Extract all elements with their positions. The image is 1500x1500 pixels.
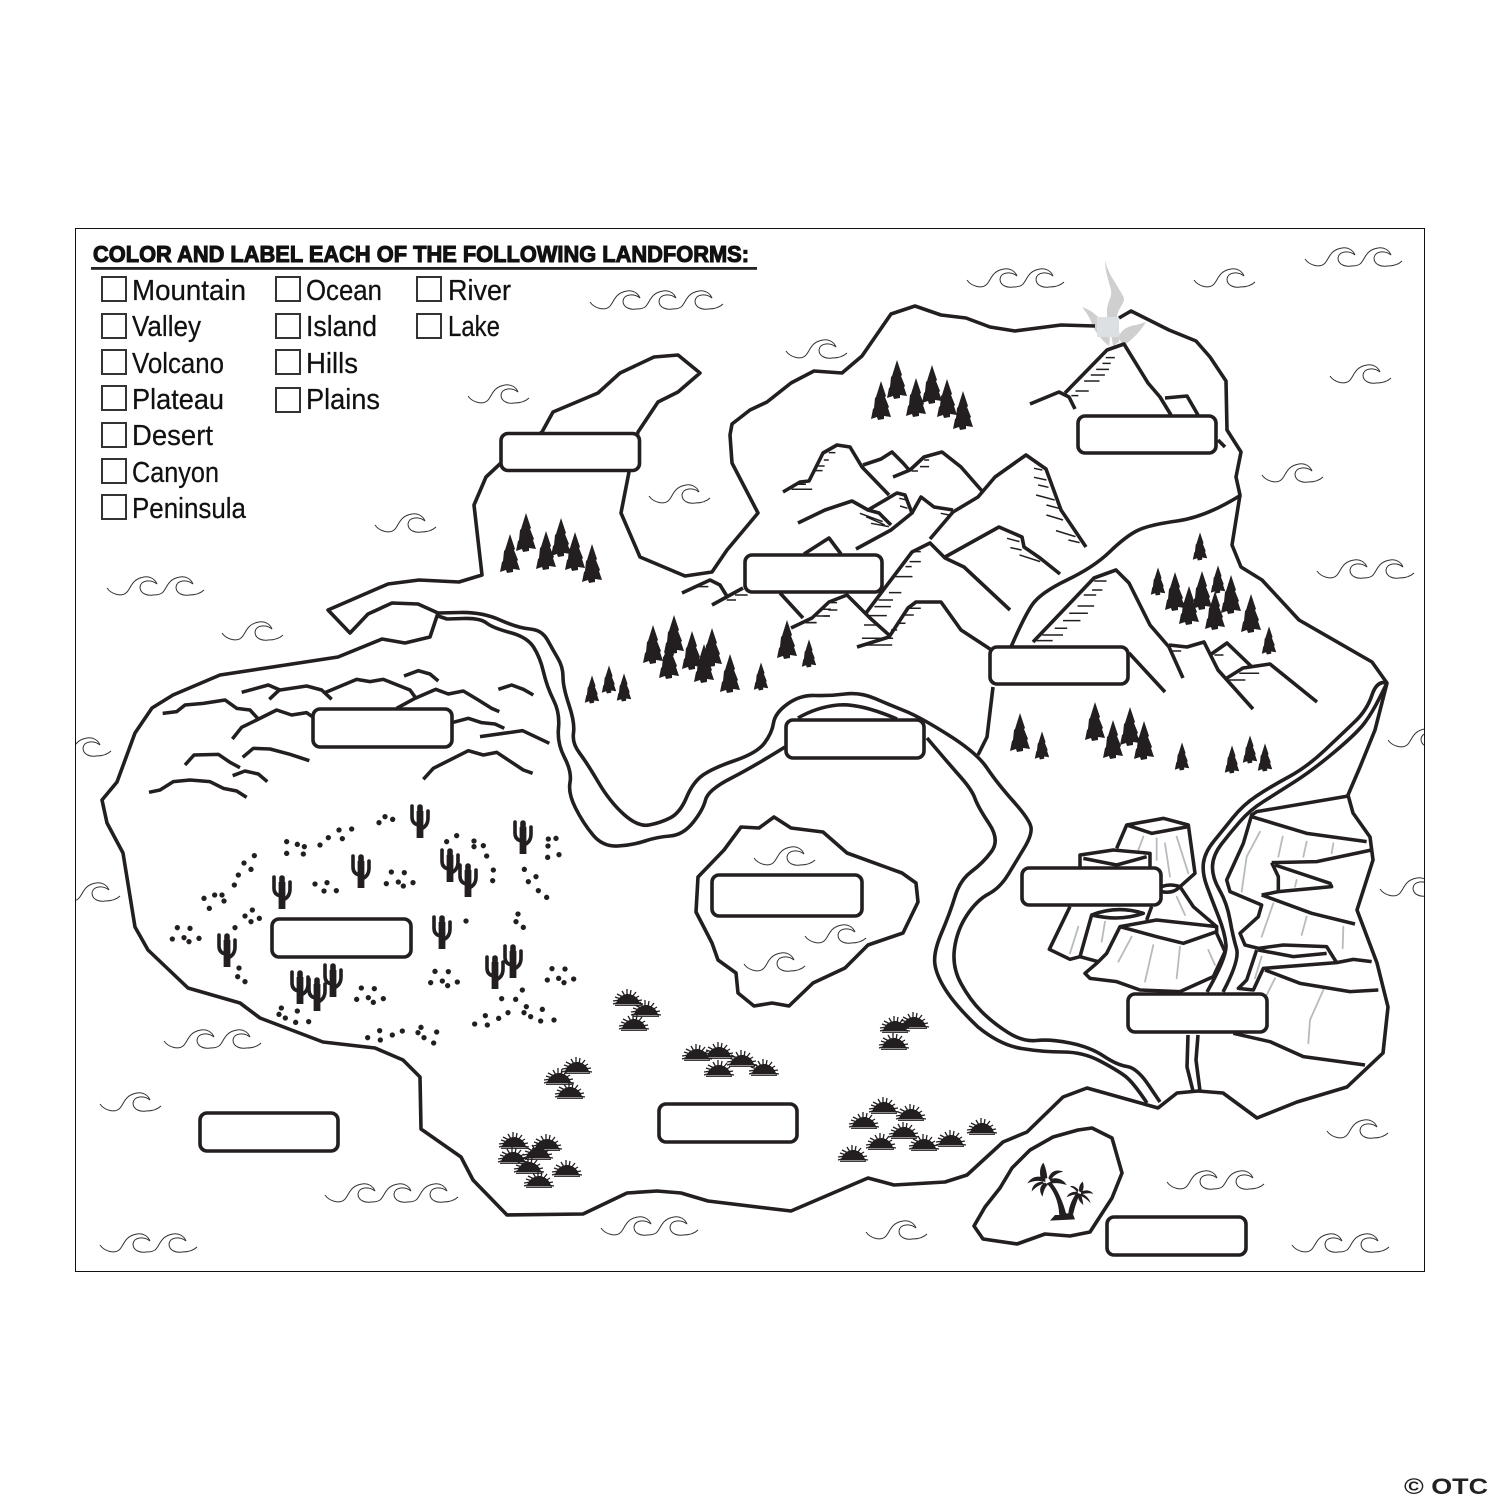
checklist item: Mountain: Mountain: [132, 275, 246, 307]
checklist item: Volcano: [102, 348, 224, 380]
label box: island: [1107, 1217, 1246, 1255]
checklist item: Hills: [276, 348, 358, 380]
checklist item: Ocean: [276, 275, 382, 307]
label box: plateau: [1022, 868, 1161, 905]
land coastline: [102, 306, 1388, 1215]
checklist item: River: [417, 275, 511, 307]
canyon and plateau water marks: [1070, 832, 1343, 1043]
checklist item: Canyon: [102, 457, 219, 489]
ocean waves: [50, 248, 1449, 1252]
copyright mark: © OTC: [1404, 1474, 1488, 1499]
label box: desert: [272, 919, 411, 957]
checklist item: Ocean: Ocean: [306, 275, 382, 307]
label box: canyon: [1128, 994, 1267, 1032]
northwest hills: [149, 671, 549, 797]
checklist item: Desert: Desert: [132, 420, 213, 452]
label box: mountain: [990, 647, 1128, 684]
checklist item: Valley: [102, 311, 201, 343]
lake outline: [696, 817, 918, 1006]
checklist item: Canyon: Canyon: [132, 457, 219, 489]
desert cacti: [219, 806, 531, 1011]
checklist item: Peninsula: Peninsula: [132, 493, 247, 525]
checklist item: Lake: [417, 311, 500, 343]
plains grass tufts: [498, 989, 997, 1187]
checklist item: Island: Island: [306, 311, 377, 343]
icon: palm trees: [1027, 1163, 1093, 1221]
label boxes: [200, 416, 1267, 1255]
mountains: [682, 344, 1317, 755]
label box: lake: [712, 875, 862, 916]
canyon walls: [1227, 796, 1378, 1065]
checklist item: Plains: Plains: [306, 384, 380, 416]
palm island outline: [974, 1128, 1122, 1244]
volcano cone: [1030, 392, 1075, 409]
label box: plains: [659, 1104, 797, 1142]
label box: peninsula: [501, 434, 640, 470]
desert sand dots: [172, 817, 574, 1043]
label box: ocean: [200, 1113, 338, 1151]
checklist item: Lake: Lake: [448, 311, 500, 343]
forests: [500, 360, 1276, 773]
label box: volcano: [1078, 416, 1216, 453]
checklist item: Hills: Hills: [306, 348, 358, 380]
checklist item: River: River: [448, 275, 511, 307]
checklist item: Island: [276, 311, 377, 343]
plateaus and canyon: [1049, 796, 1378, 1065]
heading: COLOR AND LABEL EACH OF THE FOLLOWING LANDFORMS:: [93, 241, 749, 267]
label box: hills: [313, 709, 452, 747]
west river: [438, 612, 1160, 1103]
worksheet frame: [76, 228, 1424, 1272]
volcano smoke: [1082, 260, 1146, 346]
canyon river: [1187, 682, 1387, 1091]
label box: river: [786, 720, 924, 758]
mountain hatching: [791, 358, 1259, 680]
checklist item: Plains: [276, 384, 380, 416]
checklist item: Valley: Valley: [132, 311, 201, 343]
plateaus: [1049, 818, 1225, 992]
mountain ridge lines: [682, 445, 1317, 755]
checklist of landforms: [102, 275, 511, 525]
label box: valley: [745, 555, 882, 592]
checklist item: Volcano: Volcano: [132, 348, 224, 380]
checklist item: Plateau: Plateau: [132, 384, 224, 416]
